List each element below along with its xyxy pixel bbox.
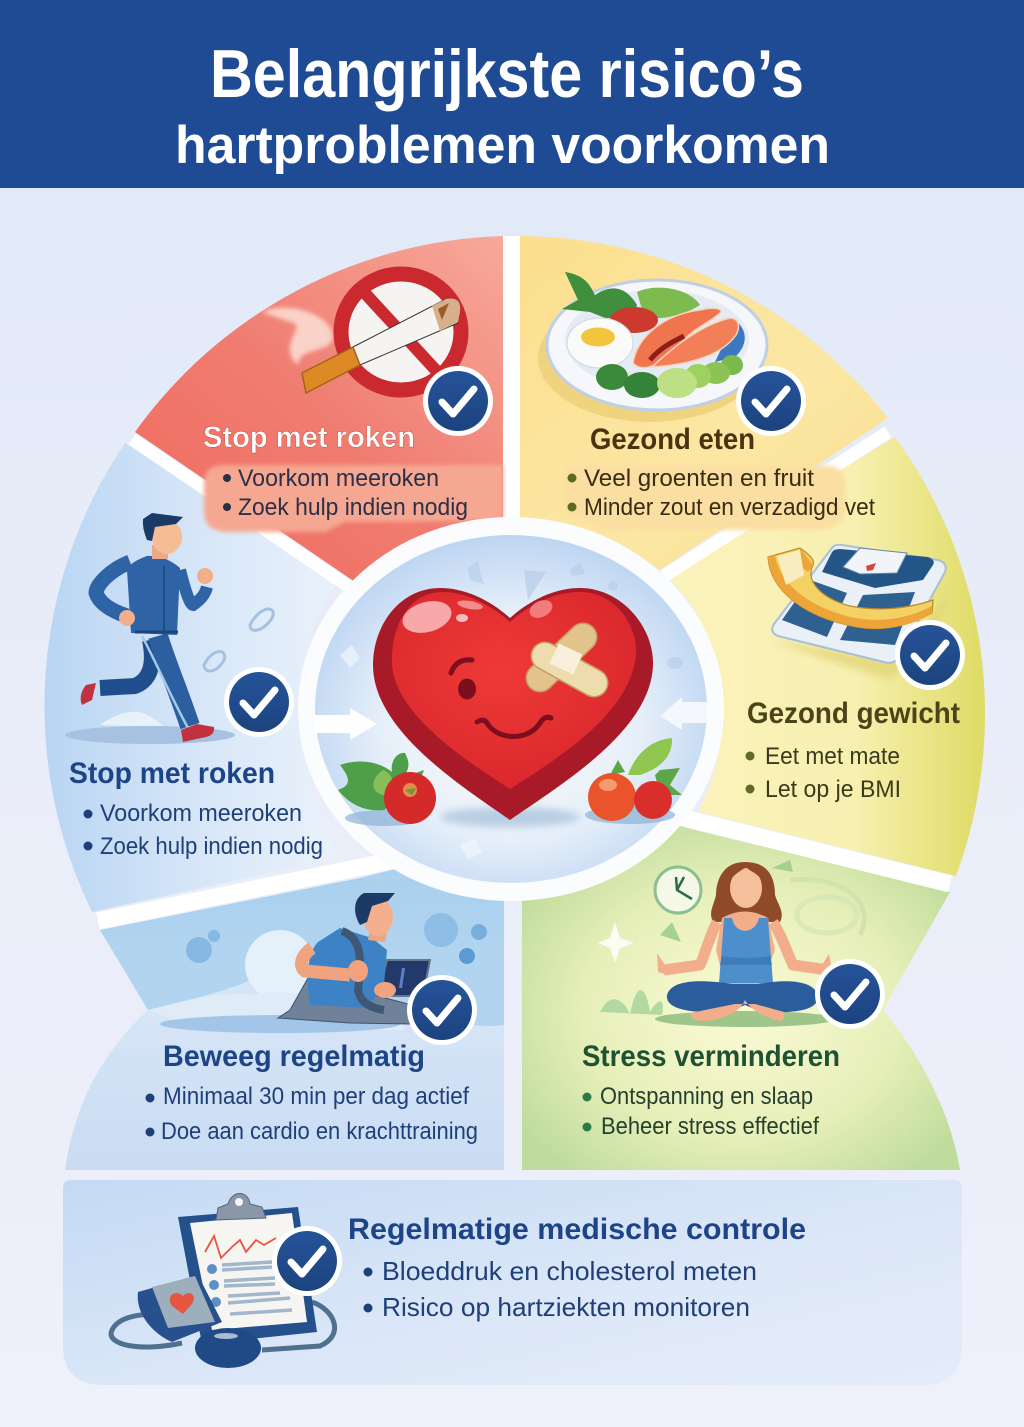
panel: beweeg regelmatig	[65, 860, 504, 1170]
heading: Stop met roken	[69, 757, 275, 790]
bullets	[364, 1256, 757, 1322]
bullets: Zoek hulp indien nodig	[100, 833, 323, 860]
icon: check badge	[895, 620, 965, 690]
ground shadow	[65, 712, 235, 744]
icon: check badge	[407, 975, 477, 1045]
icon: meditating woman	[655, 862, 835, 1027]
bullets: Doe aan cardio en krachttraining	[161, 1118, 478, 1145]
icon: check badge	[272, 1226, 342, 1296]
bullets	[746, 743, 901, 803]
text backdrop	[565, 466, 846, 530]
bullets: Minimaal 30 min per dag actief	[163, 1083, 469, 1110]
icon: check badge	[423, 366, 493, 436]
bullets: Voorkom meeroken	[238, 465, 439, 492]
panel: stop met roken (red)	[135, 236, 503, 582]
panel: stop met roken (blue, runner)	[44, 443, 340, 912]
smoke	[262, 308, 333, 365]
bullets: Risico op hartziekten monitoren	[382, 1292, 750, 1322]
icon: no smoking sign	[302, 274, 461, 393]
bullets: Minder zout en verzadigd vet	[584, 494, 875, 521]
icon: runner	[81, 513, 214, 742]
bullets: Eet met mate	[765, 743, 900, 770]
icon: check badge	[815, 959, 885, 1029]
panel: stress verminderen	[522, 818, 960, 1170]
icon: tomatoes and greens right	[588, 738, 682, 821]
heading: Beweeg regelmatig	[163, 1040, 425, 1073]
heading: Stress verminderen	[582, 1040, 840, 1073]
shadow under heart	[440, 807, 580, 827]
smile	[477, 717, 551, 737]
bullets: Voorkom meeroken	[100, 800, 302, 827]
subtitle: hartproblemen voorkomen	[175, 116, 830, 175]
heading: Regelmatige medische controle	[348, 1213, 806, 1246]
panel: central heart	[298, 517, 724, 901]
panel: regelmatige medische controle	[63, 1180, 962, 1385]
panel: gezond eten (yellow)	[520, 236, 888, 570]
icon: check badge	[224, 667, 294, 737]
white ring	[298, 517, 724, 901]
header banner	[0, 0, 1024, 188]
icon: check badge	[736, 366, 806, 436]
background hills and bubbles	[100, 879, 504, 1033]
icon: plate of food	[538, 272, 767, 422]
band-aid	[540, 637, 594, 683]
bullets: Veel groenten en fruit	[584, 465, 814, 492]
bullets: Beheer stress effectief	[601, 1113, 819, 1140]
icon: clipboard with blood pressure cuff	[111, 1194, 335, 1368]
bullets	[84, 800, 323, 860]
bullets	[146, 1083, 478, 1145]
inner circle	[315, 535, 707, 883]
panel: gezond gewicht (lime)	[665, 437, 985, 876]
heading: Gezond eten	[590, 423, 755, 456]
title: Belangrijkste risico’s	[210, 36, 804, 112]
eye	[458, 678, 476, 700]
icon: clock	[655, 867, 701, 913]
bullets: Ontspanning en slaap	[600, 1083, 813, 1110]
icon: heart	[373, 588, 653, 820]
eye wink	[451, 660, 472, 673]
icon: tomato and greens left	[338, 753, 436, 824]
heading: Stop met roken	[203, 421, 415, 454]
bullets	[568, 465, 875, 521]
bullets	[582, 1083, 819, 1140]
white dividers between panels	[98, 236, 950, 921]
icon: scale and tape measure	[768, 545, 950, 680]
bullets	[223, 465, 468, 521]
heading: Gezond gewicht	[747, 697, 960, 730]
bullets: Bloeddruk en cholesterol meten	[382, 1256, 757, 1286]
arrow left	[315, 708, 377, 740]
bullets: Zoek hulp indien nodig	[238, 494, 468, 521]
motion marks	[204, 609, 273, 671]
faint background symbols	[340, 560, 683, 860]
bullets: Let op je BMI	[765, 776, 901, 803]
arrow right	[660, 697, 707, 730]
wave and leaf decoration	[598, 860, 864, 1015]
text backdrop	[204, 465, 503, 532]
icon: man at laptop	[278, 893, 430, 1024]
